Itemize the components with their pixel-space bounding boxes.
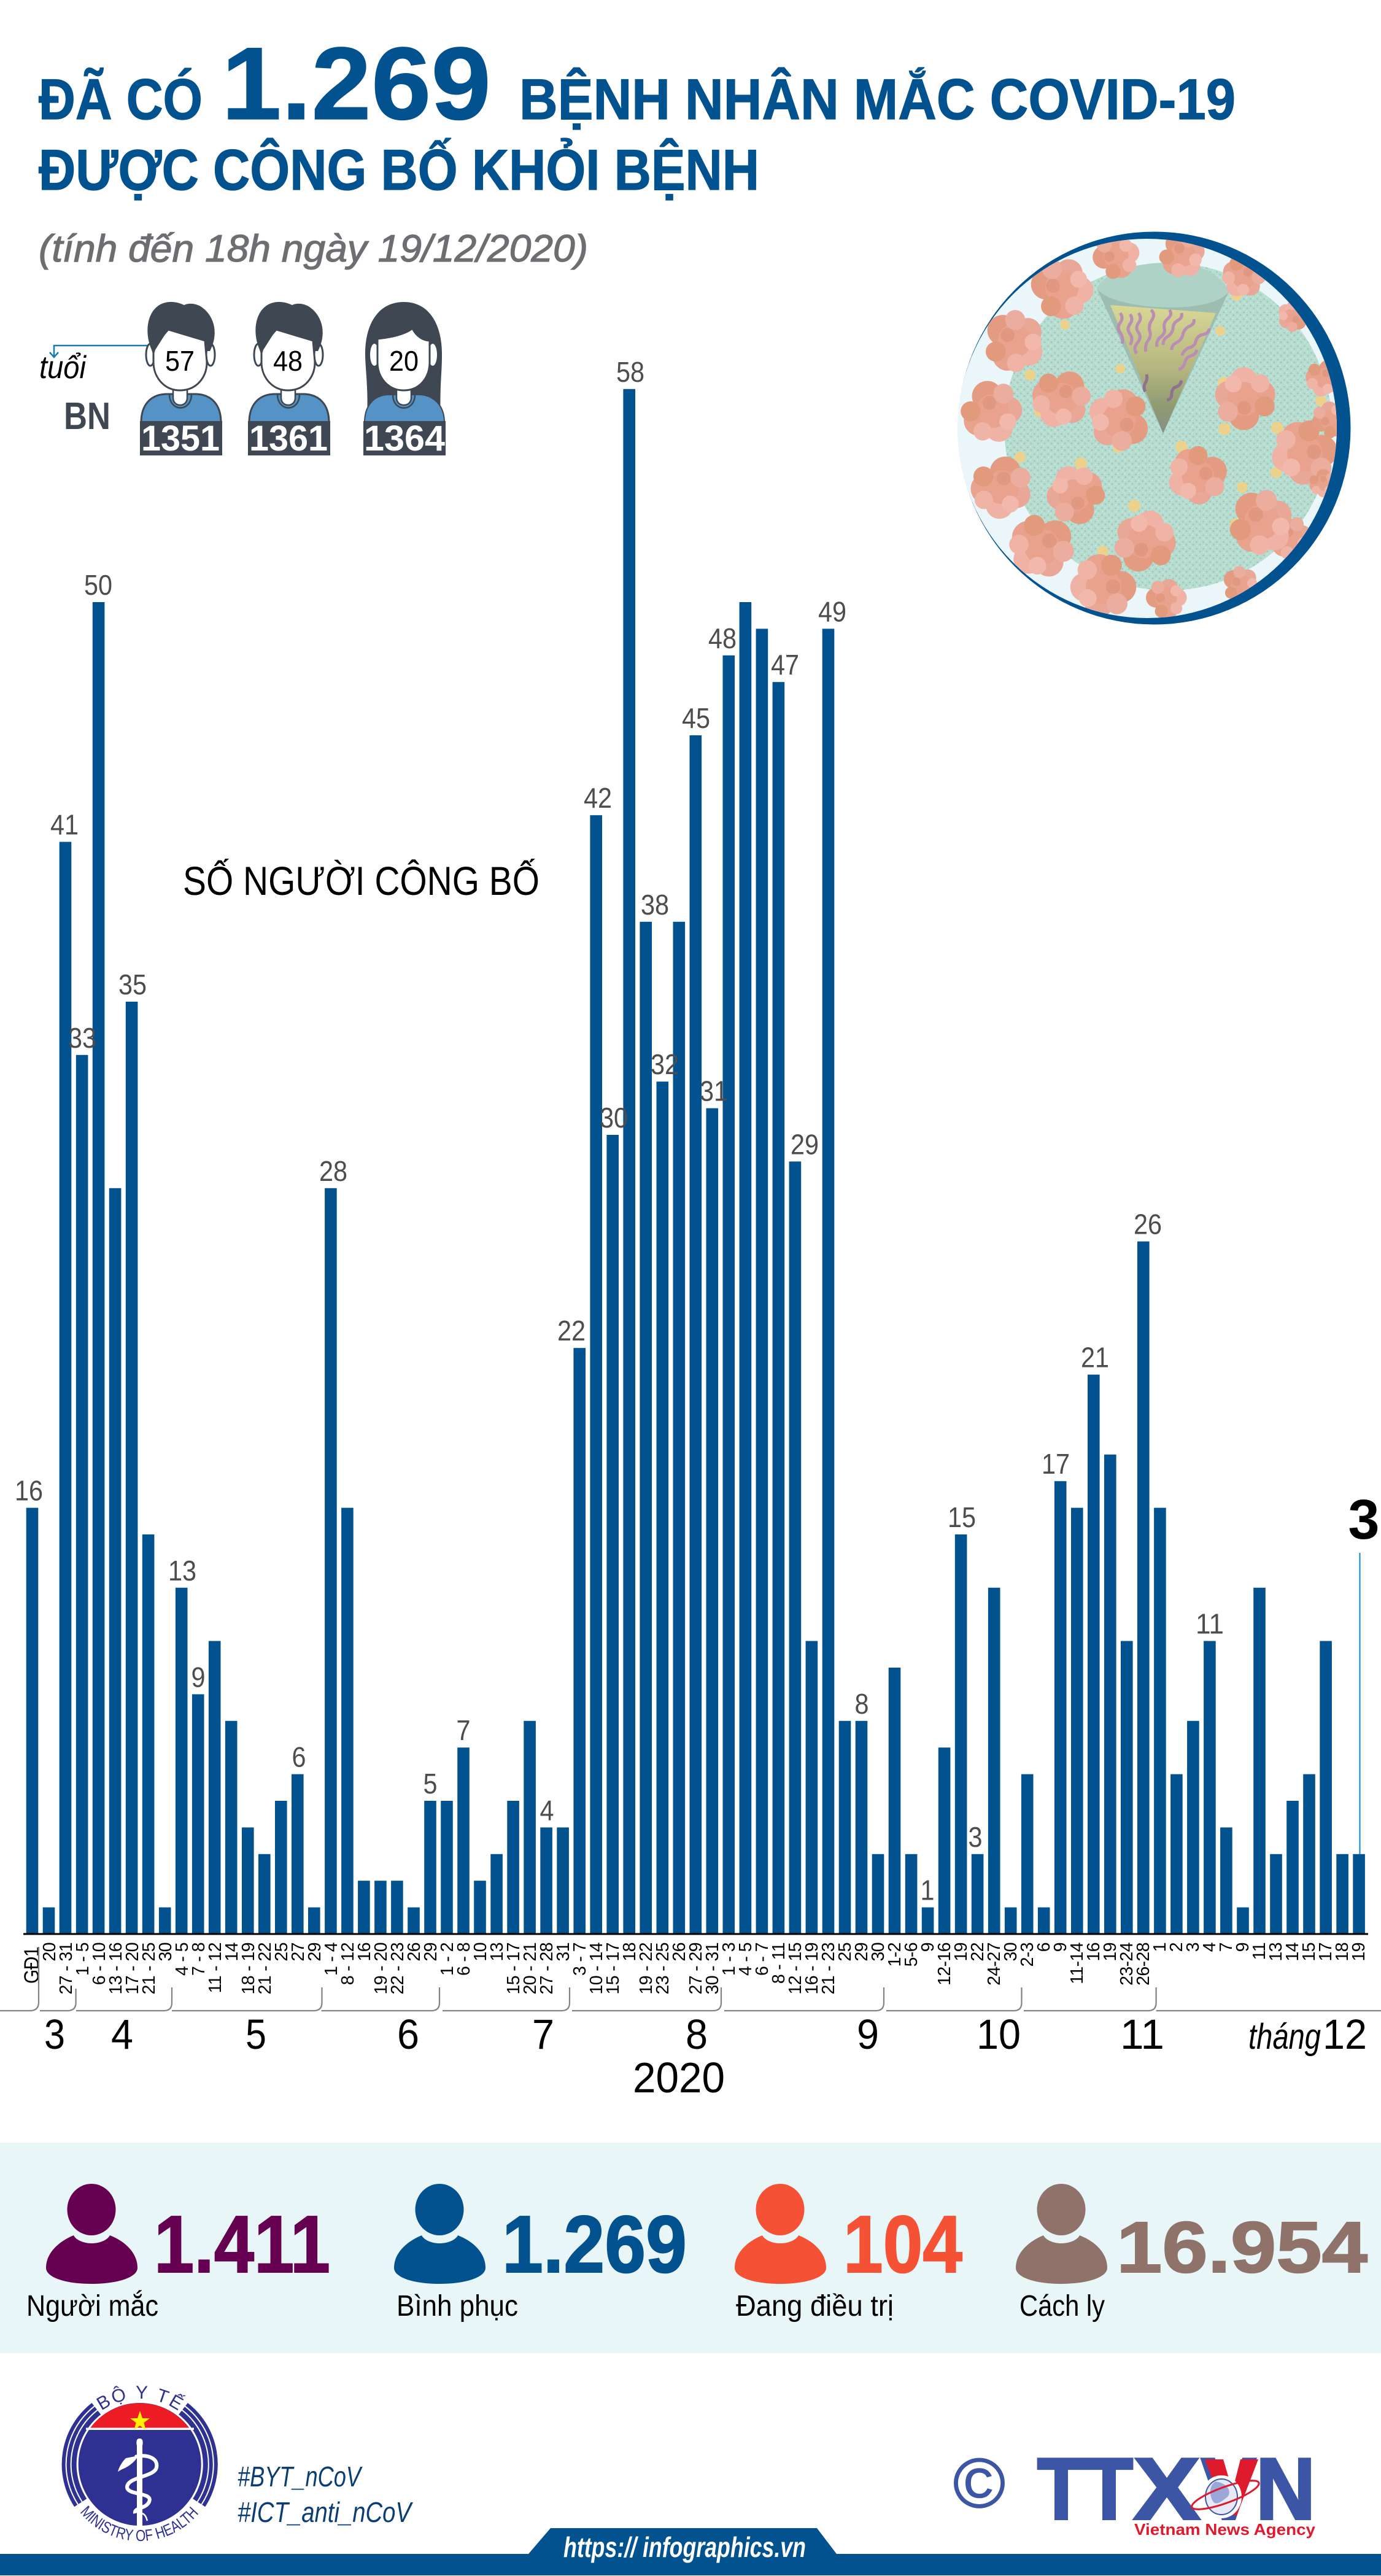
- stat: đang điều trị: 104: [843, 2199, 962, 2289]
- axis date labels: 9: [1051, 1943, 1070, 1952]
- title: BỆNH NHÂN MẮC COVID-19: [519, 66, 1236, 131]
- axis date labels: 16 - 19: [802, 1943, 822, 1995]
- bar value labels: 31: [700, 1075, 728, 1107]
- stat: cách ly: Cách ly: [1019, 2290, 1105, 2323]
- axis date labels: 6 - 8: [454, 1943, 474, 1976]
- virus illustration: [956, 227, 1351, 629]
- axis date labels: 1 - 2: [438, 1943, 457, 1976]
- axis date labels: 26: [670, 1943, 689, 1962]
- bar value labels: 47: [771, 649, 799, 681]
- title: 1.269: [222, 26, 491, 141]
- month labels: [44, 2011, 1367, 2058]
- stat: bình phục: [394, 2184, 687, 2323]
- axis date labels: 6: [1034, 1943, 1054, 1952]
- patient 1364: 20: [389, 345, 419, 377]
- axis date labels: 7 - 8: [189, 1943, 209, 1976]
- stat: cách ly: [1016, 2184, 1367, 2323]
- axis date labels: 4 - 5: [736, 1943, 756, 1976]
- bar value labels: 13: [168, 1555, 196, 1587]
- axis date labels: 6 - 10: [90, 1943, 109, 1985]
- bar value labels: 42: [584, 782, 612, 814]
- bar value labels: 33: [68, 1022, 96, 1054]
- patient ages legend: tuổi: [39, 346, 148, 385]
- axis date labels: 19: [1349, 1943, 1369, 1962]
- axis date labels: 1 - 3: [719, 1943, 739, 1976]
- bar value labels: 7: [457, 1714, 470, 1746]
- month labels: 7: [532, 2011, 554, 2058]
- axis date labels: 16: [355, 1943, 374, 1962]
- bar value labels: 49: [818, 595, 846, 627]
- axis date labels: 2-3: [1018, 1943, 1037, 1967]
- axis date labels: 27: [288, 1943, 308, 1962]
- axis date labels: 19: [1101, 1943, 1120, 1962]
- axis date labels: 7: [1217, 1943, 1236, 1952]
- axis date labels: 10 - 14: [587, 1942, 606, 1995]
- bar value labels: 28: [319, 1155, 347, 1187]
- bar chart: [26, 389, 1365, 1934]
- axis date labels: 1: [1150, 1943, 1170, 1952]
- axis date labels: 11: [1250, 1943, 1269, 1960]
- month labels: 8: [686, 2011, 708, 2058]
- logo: Bộ Y tế: BỘ Y TẾ: [96, 2386, 186, 2411]
- axis date labels: 8 - 12: [338, 1943, 358, 1985]
- title: ĐÃ CÓ: [39, 67, 203, 131]
- axis date labels: 26-28: [1134, 1943, 1153, 1986]
- bar value labels: 6: [292, 1741, 306, 1773]
- bar value labels: 16: [15, 1475, 43, 1507]
- axis date labels: 9: [918, 1943, 938, 1952]
- axis date labels: 17 - 20: [123, 1943, 142, 1995]
- axis date labels: 13 - 16: [106, 1943, 126, 1995]
- patient 1351: 57: [165, 345, 195, 377]
- axis date labels: GĐ1: [20, 1947, 44, 1984]
- month brackets: [0, 1947, 1381, 2011]
- patient 1364: 1364: [364, 419, 445, 458]
- axis date labels: 20: [40, 1943, 60, 1962]
- bar value labels: 11: [1196, 1608, 1224, 1640]
- axis date labels: 22: [968, 1943, 988, 1962]
- bar value labels: 30: [600, 1102, 628, 1134]
- axis date labels: 21 - 23: [819, 1943, 838, 1995]
- axis date labels: 2: [1167, 1943, 1186, 1952]
- patient 1361: 48: [273, 345, 303, 377]
- stat: người mắc: Người mắc: [26, 2289, 158, 2323]
- logo: Bộ Y tế: MINISTRY OF HEALTH: [80, 2505, 198, 2541]
- subtitle: date: (tính đến 18h ngày 19/12/2020): [39, 228, 588, 270]
- axis date labels: 23-24: [1117, 1942, 1137, 1986]
- hashtags: #ICT_anti_nCoV: [238, 2496, 414, 2528]
- bar value labels: 17: [1042, 1448, 1070, 1480]
- logo: TTXVN: TT: [1037, 2440, 1133, 2538]
- month labels: 10: [977, 2011, 1021, 2058]
- logo: TTXVN: X: [1134, 2440, 1200, 2538]
- axis date labels: 25: [272, 1943, 292, 1962]
- axis date labels: 5-6: [902, 1943, 921, 1967]
- month labels: 12: [1323, 2011, 1367, 2058]
- axis date labels: 29: [421, 1943, 441, 1962]
- axis date labels: 30: [868, 1943, 888, 1962]
- bar value labels: 58: [616, 356, 644, 388]
- axis date labels: 15 - 17: [603, 1943, 623, 1995]
- bar value labels: 5: [424, 1768, 437, 1800]
- patient ages legend: tuổi: tuổi: [39, 350, 87, 385]
- bar value labels: 32: [651, 1048, 679, 1080]
- axis date labels: 4: [1200, 1942, 1220, 1952]
- axis date labels: 18: [620, 1943, 640, 1962]
- month labels: 3: [44, 2011, 65, 2058]
- axis date labels: 14: [222, 1942, 242, 1962]
- axis date labels: 11-14: [1067, 1942, 1087, 1984]
- bar value labels: 1: [921, 1874, 934, 1906]
- bar value labels: 15: [948, 1501, 976, 1533]
- month labels: 5: [246, 2011, 266, 2058]
- axis date labels: 4 - 5: [172, 1943, 192, 1976]
- axis date labels: 26: [404, 1943, 424, 1962]
- bar value labels: 22: [557, 1315, 586, 1347]
- month labels: 6: [397, 2011, 419, 2058]
- axis date labels: 24-27: [984, 1943, 1004, 1986]
- chart heading: SỐ NGƯỜI CÔNG BỐ: [183, 858, 540, 903]
- logo: TTXVN: [1037, 2440, 1316, 2539]
- bar value labels: 41: [50, 809, 79, 841]
- axis date labels: 19: [951, 1943, 971, 1962]
- year label: 2020: [633, 2054, 725, 2102]
- axis date labels: 19 - 22: [636, 1943, 656, 1995]
- axis date labels: 9: [1233, 1943, 1253, 1952]
- axis date labels: 22 - 23: [388, 1943, 408, 1995]
- bar value labels: 3: [969, 1821, 982, 1853]
- month labels: 4: [111, 2011, 133, 2058]
- website url: https:// infographics.vn: [563, 2531, 806, 2563]
- stat: cách ly: 16.954: [1116, 2207, 1367, 2288]
- month labels: tháng: [1248, 2017, 1321, 2057]
- bar value labels: 4: [540, 1794, 554, 1826]
- axis date labels: 30 - 31: [703, 1943, 722, 1995]
- patient 1361: [248, 302, 330, 458]
- patient legend: BN: BN: [64, 395, 110, 438]
- axis line: [23, 1933, 1368, 1935]
- stat: đang điều trị: Đang điều trị: [736, 2290, 894, 2323]
- axis date labels: 19 - 20: [371, 1943, 391, 1995]
- axis date labels: 15 - 17: [504, 1943, 524, 1995]
- hashtags: [238, 2461, 414, 2528]
- patient 1351: [140, 302, 222, 458]
- axis date labels: 1-2: [885, 1943, 905, 1967]
- copyright mark: ©: [953, 2445, 1005, 2523]
- patient 1351: 1351: [141, 419, 220, 458]
- panel: totals: [0, 2143, 1381, 2353]
- axis date labels: 31: [554, 1943, 573, 1962]
- axis date labels: 27 - 29: [686, 1943, 706, 1995]
- title: ĐƯỢC CÔNG BỐ KHỎI BỆNH: [39, 137, 759, 202]
- bar value labels: 45: [682, 702, 710, 734]
- axis date labels: 17: [1316, 1943, 1336, 1962]
- axis date labels: 6 - 7: [752, 1943, 772, 1976]
- axis date labels: 23 - 25: [653, 1943, 673, 1995]
- bar value labels: [15, 356, 1224, 1906]
- hashtags: #BYT_nCoV: [238, 2461, 363, 2493]
- stat: người mắc: [26, 2184, 330, 2323]
- axis date labels: 27 - 31: [56, 1943, 76, 1995]
- highlighted value: latest day: 3: [1348, 1488, 1380, 1551]
- axis date labels: 30: [156, 1943, 176, 1962]
- logo: TTXVN: Vietnam News Agency: [1134, 2520, 1316, 2539]
- axis date labels: 3 - 7: [570, 1943, 590, 1976]
- axis date labels: [20, 1942, 1369, 1995]
- month labels: 9: [857, 2011, 879, 2058]
- axis date labels: 16: [1084, 1943, 1104, 1962]
- axis date labels: 13: [1266, 1943, 1286, 1962]
- stat: đang điều trị: [735, 2184, 962, 2323]
- stat: bình phục: Bình phục: [397, 2290, 518, 2323]
- axis date labels: 25: [835, 1943, 855, 1962]
- axis date labels: 10: [471, 1943, 490, 1962]
- logo: TTXVN: VN: [1201, 2440, 1315, 2538]
- bar value labels: 35: [118, 969, 147, 1000]
- axis date labels: 8 - 11: [769, 1943, 789, 1984]
- month labels: 11: [1120, 2011, 1164, 2058]
- bar value labels: 9: [191, 1661, 205, 1693]
- stat: người mắc: 1.411: [154, 2199, 330, 2289]
- footer bar: [0, 2528, 1381, 2575]
- axis date labels: 18 - 19: [239, 1943, 258, 1995]
- axis date labels: 27 - 28: [537, 1943, 557, 1995]
- bar value labels: 26: [1134, 1209, 1162, 1240]
- axis date labels: 21 - 22: [255, 1943, 275, 1995]
- axis date labels: 21 - 25: [139, 1943, 159, 1995]
- axis date labels: 13: [487, 1943, 507, 1962]
- axis date labels: 12 - 15: [786, 1943, 805, 1995]
- bar value labels: 8: [854, 1688, 869, 1720]
- axis date labels: 20 - 21: [520, 1943, 540, 1995]
- axis date labels: 11 - 12: [206, 1943, 225, 1993]
- axis date labels: 14: [1283, 1942, 1302, 1962]
- bar value labels: 29: [791, 1128, 819, 1160]
- axis date labels: 15: [1299, 1943, 1319, 1962]
- bar value labels: 38: [641, 889, 669, 921]
- bar value labels: 21: [1081, 1342, 1109, 1374]
- axis date labels: 29: [305, 1943, 325, 1962]
- patient 1361: 1361: [249, 419, 328, 458]
- bar value labels: 50: [84, 569, 112, 601]
- axis date labels: 30: [1001, 1943, 1021, 1962]
- axis date labels: 1 - 5: [73, 1943, 93, 1976]
- axis date labels: 29: [852, 1943, 872, 1962]
- axis date labels: 3: [1183, 1943, 1203, 1952]
- axis date labels: 1 - 4: [322, 1942, 341, 1976]
- stat: bình phục: 1.269: [502, 2199, 687, 2289]
- axis date labels: 12-16: [935, 1943, 954, 1986]
- patient 1364: [363, 302, 446, 458]
- axis date labels: 18: [1333, 1943, 1352, 1962]
- title: [39, 26, 1236, 202]
- logo: Bộ Y tế: [61, 2386, 218, 2541]
- bar value labels: 48: [708, 622, 737, 654]
